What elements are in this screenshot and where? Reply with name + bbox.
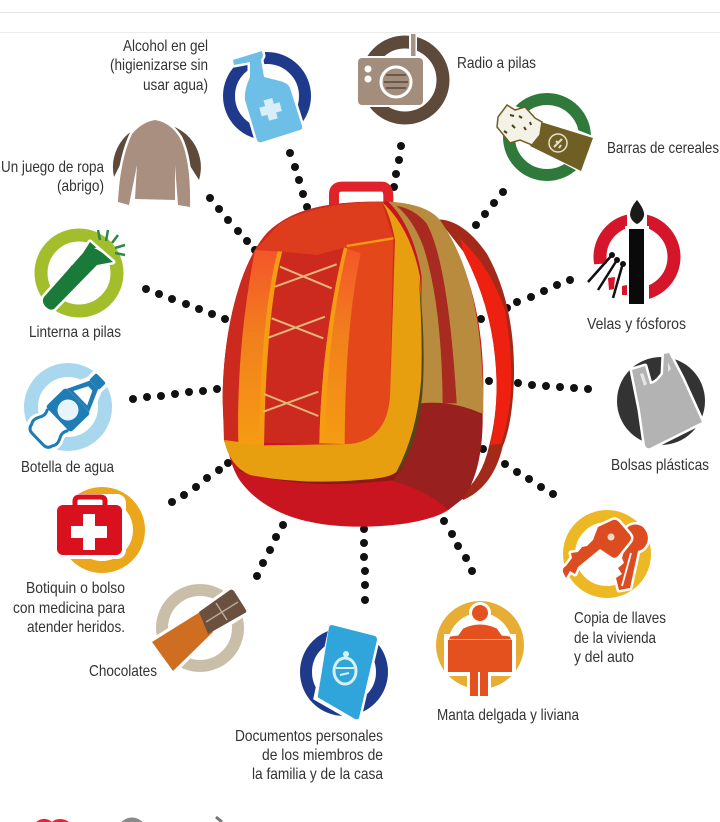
item: radio a pilas — [356, 33, 536, 118]
label: Manta delgada y liviana — [437, 707, 579, 724]
icon: keys — [563, 516, 648, 592]
backpack illustration — [223, 187, 514, 527]
yellow frame — [224, 202, 422, 482]
label: Linterna a pilas — [29, 324, 121, 341]
laces — [263, 264, 337, 416]
item: bolsas plasticas — [611, 353, 709, 474]
dotted connectors — [129, 142, 592, 604]
label — [13, 580, 125, 636]
item: manta delgada y liviana — [437, 602, 579, 724]
label: Botiquin o bolso — [26, 580, 125, 597]
item: velas y fosforos — [585, 200, 686, 333]
icon: person with blanket — [442, 602, 518, 698]
label: Botella de agua — [21, 459, 114, 476]
icon: hand sanitizer — [229, 51, 305, 142]
item: botella de agua — [21, 363, 115, 476]
icon: cereal bar — [496, 99, 593, 175]
label: atender heridos. — [27, 619, 125, 636]
label: Un juego de ropa — [1, 159, 104, 176]
icon: flashlight — [41, 230, 125, 311]
label: Alcohol en gel — [123, 38, 208, 55]
front panel — [223, 202, 400, 447]
label — [1, 159, 104, 195]
shoulder strap — [438, 219, 514, 500]
label: usar agua) — [143, 77, 208, 94]
icon: first aid kit — [54, 493, 139, 567]
side tan panel — [388, 202, 483, 413]
top handle — [334, 187, 388, 207]
icon: passport — [306, 624, 382, 722]
label: Velas y fósforos — [587, 316, 686, 333]
label: con medicina para — [13, 600, 125, 617]
label: Radio a pilas — [457, 55, 536, 72]
label: la familia y de la casa — [252, 766, 383, 783]
icon: comment — [118, 818, 146, 822]
item: chocolates — [89, 588, 248, 680]
item: copia de llaves — [563, 516, 666, 666]
label: Documentos personales — [235, 728, 383, 745]
label: Copia de llaves — [574, 610, 666, 627]
lower pocket — [390, 403, 483, 510]
icon: water bottle — [21, 363, 115, 456]
item: alcohol en gel — [110, 38, 305, 142]
item: documentos personales — [235, 624, 383, 783]
label — [110, 38, 208, 94]
icon: chocolate bar — [150, 588, 248, 673]
item: botiquin — [13, 493, 139, 636]
icon: share — [216, 817, 222, 822]
label — [235, 728, 383, 783]
item: un juego de ropa — [1, 120, 201, 207]
cropped app icons at bottom edge — [33, 817, 222, 822]
label: Chocolates — [89, 663, 157, 680]
label: de los miembros de — [262, 747, 383, 764]
left strap — [238, 250, 282, 445]
icon: radio — [356, 33, 443, 118]
item: barras de cereales — [496, 99, 719, 175]
label — [574, 610, 666, 666]
label: y del auto — [574, 649, 634, 666]
label: (higienizarse sin — [110, 57, 208, 74]
label: (abrigo) — [57, 178, 104, 195]
icon: plastic bag — [617, 353, 705, 448]
label: de la vivienda — [574, 630, 656, 647]
maroon stripe — [397, 206, 457, 403]
backpack body — [223, 202, 483, 527]
icon: heart — [33, 819, 72, 822]
shadow under yellow band — [237, 467, 403, 484]
icon: jacket — [113, 120, 201, 207]
icon: candle and matches — [585, 200, 674, 310]
right strap — [319, 247, 361, 444]
item: linterna a pilas — [29, 230, 125, 341]
